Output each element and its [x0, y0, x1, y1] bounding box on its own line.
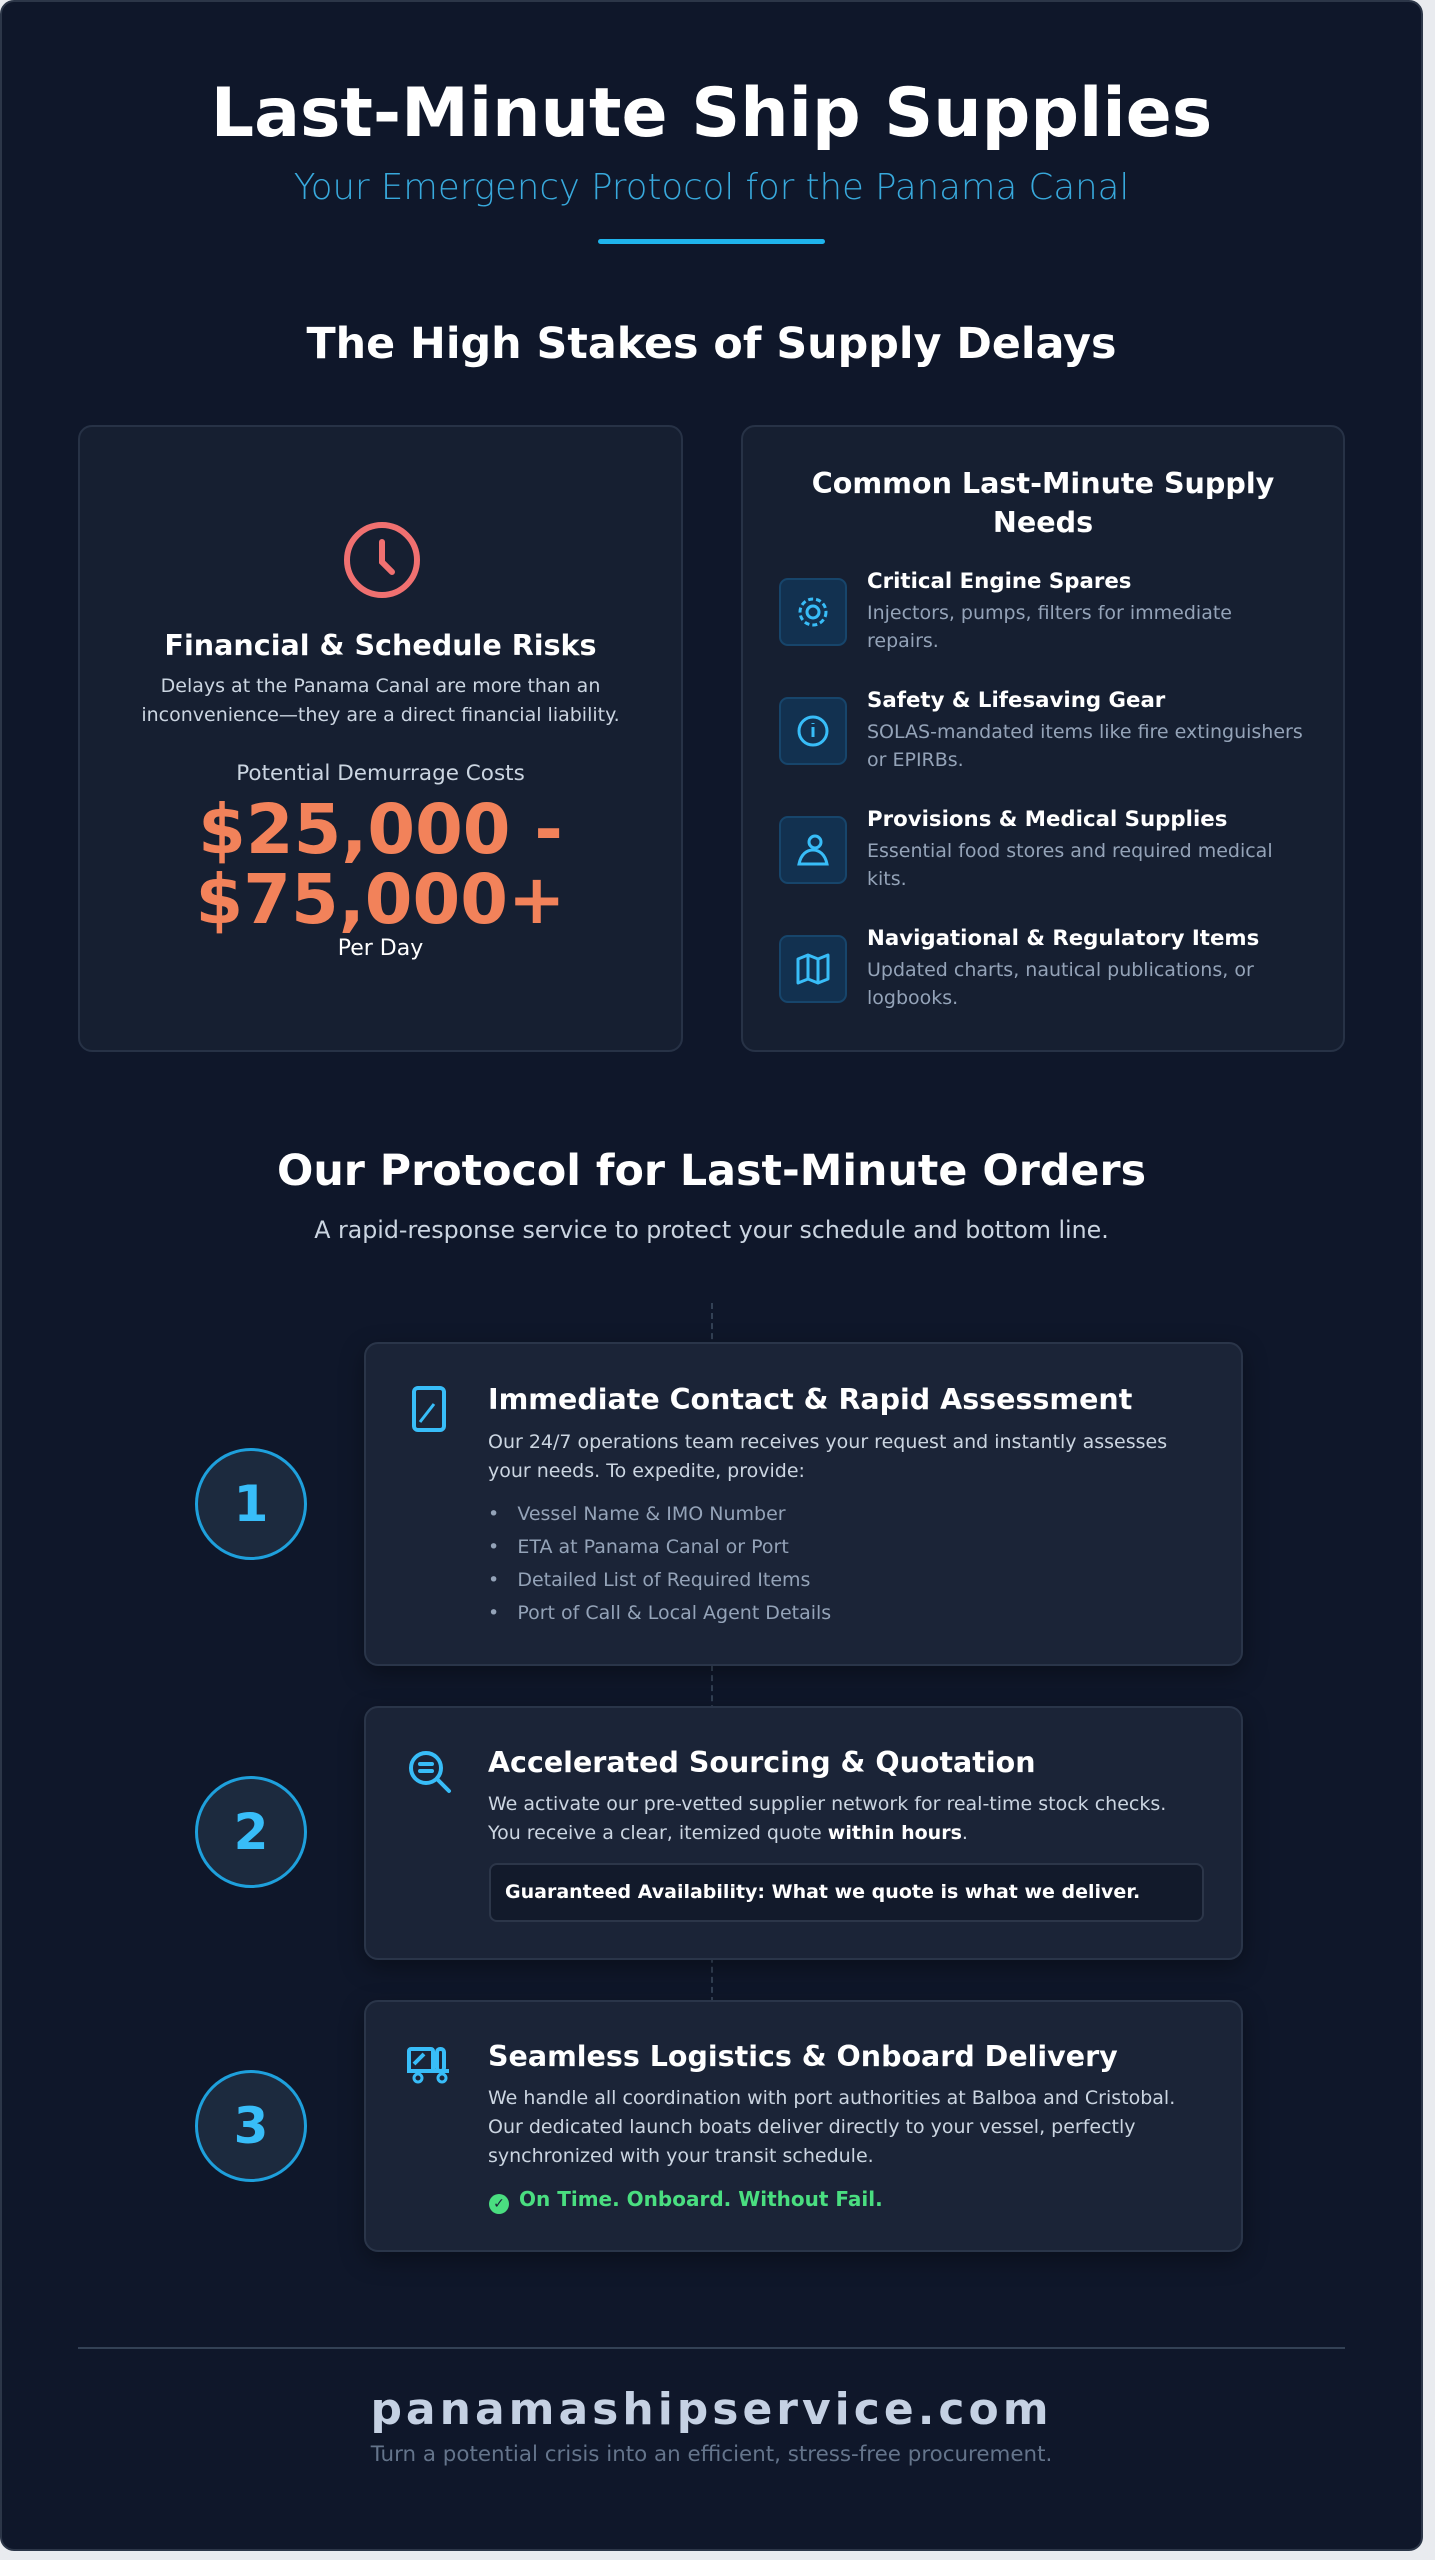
- footer domain: panamashipservice.com: [370, 2384, 1053, 2435]
- icon: lifebuoy: [779, 697, 847, 765]
- item: safety gear: [779, 697, 847, 765]
- heading: Common Last-Minute Supply Needs: [812, 466, 1274, 539]
- item: engine spares: [779, 578, 847, 646]
- step 3 card: [364, 2000, 1243, 2252]
- item: navigational: [779, 935, 847, 1003]
- step 2 body: We activate our pre-vetted supplier network for real-time stock checks. You receive a clear, itemized quote within hours.: [488, 1793, 1166, 1844]
- icon: gear: [779, 578, 847, 646]
- step 3 number: [195, 2070, 307, 2182]
- text: Safety & Lifesaving Gear: [867, 688, 1165, 713]
- step 1 card: [364, 1342, 1243, 1666]
- step 1 list: [488, 1503, 831, 1624]
- heading: protocol: Our Protocol for Last-Minute Orders: [277, 1146, 1146, 1196]
- label: Potential Demurrage Costs: [236, 761, 525, 786]
- text: Critical Engine Spares: [867, 569, 1131, 594]
- step 3 title: Seamless Logistics & Onboard Delivery: [488, 2040, 1118, 2073]
- heading: Financial & Schedule Risks: [164, 628, 597, 662]
- step 2 card: [364, 1706, 1243, 1960]
- icon: truck: [407, 2047, 449, 2084]
- step 1 list: • Vessel Name & IMO Number: [488, 1503, 786, 1525]
- icon: map: [779, 935, 847, 1003]
- step 1 number: [195, 1448, 307, 1560]
- icon: clipboard: [412, 1386, 446, 1432]
- text: Essential food stores and required medical kits.: [867, 840, 1273, 890]
- heading: high stakes: The High Stakes of Supply Delays: [306, 319, 1117, 369]
- description: Delays at the Panama Canal are more than an inconvenience—they are a direct financial liability.: [141, 675, 620, 726]
- callout: on time: ✓: [493, 2196, 505, 2212]
- step 2 number: [195, 1776, 307, 1888]
- guarantee box: [489, 1863, 1204, 1922]
- icon: clock: [344, 522, 420, 598]
- subtitle: Your Emergency Protocol for the Panama Canal: [294, 167, 1129, 208]
- step 1 list: • Detailed List of Required Items: [488, 1569, 810, 1591]
- text: Navigational & Regulatory Items: [867, 926, 1259, 951]
- step 1 number: 1: [234, 1475, 268, 1533]
- panel: financial risks: [78, 425, 683, 1052]
- text: Injectors, pumps, filters for immediate repairs.: [867, 602, 1232, 652]
- big number: [196, 790, 565, 940]
- callout: on time: On Time. Onboard. Without Fail.: [519, 2187, 883, 2211]
- per day: Per Day: [338, 936, 423, 961]
- step 1 title: Immediate Contact & Rapid Assessment: [488, 1383, 1132, 1416]
- text: Provisions & Medical Supplies: [867, 807, 1227, 832]
- step 3 body: We handle all coordination with port authorities at Balboa and Cristobal. Our dedicated launch boats deliver directly to your vessel, perfectly synchronized with your transit schedule.: [488, 2087, 1175, 2167]
- step 1 list: • ETA at Panama Canal or Port: [488, 1536, 789, 1558]
- step 1 list: • Port of Call & Local Agent Details: [488, 1602, 831, 1624]
- big number: $25,000 -: [198, 790, 563, 870]
- text: Updated charts, nautical publications, or logbooks.: [867, 959, 1254, 1009]
- guarantee box: Guaranteed Availability: What we quote is what we deliver.: [505, 1881, 1140, 1903]
- panel: common needs: [741, 425, 1345, 1052]
- title: Last-Minute Ship Supplies: [211, 74, 1212, 153]
- icon: search: [409, 1751, 452, 1794]
- protocol subtitle: A rapid-response service to protect your schedule and bottom line.: [314, 1216, 1109, 1244]
- item: provisions: [779, 816, 847, 884]
- footer tagline: Turn a potential crisis into an efficient, stress-free procurement.: [371, 2442, 1052, 2467]
- step 3 number: 3: [234, 2097, 268, 2155]
- text: SOLAS-mandated items like fire extinguishers or EPIRBs.: [867, 721, 1303, 771]
- step 2 number: 2: [234, 1803, 268, 1861]
- icon: person: [779, 816, 847, 884]
- big number: $75,000+: [196, 860, 565, 940]
- step 2 title: Accelerated Sourcing & Quotation: [488, 1746, 1036, 1779]
- step 1 body: Our 24/7 operations team receives your request and instantly assesses your needs. To expedite, provide:: [488, 1431, 1167, 1482]
